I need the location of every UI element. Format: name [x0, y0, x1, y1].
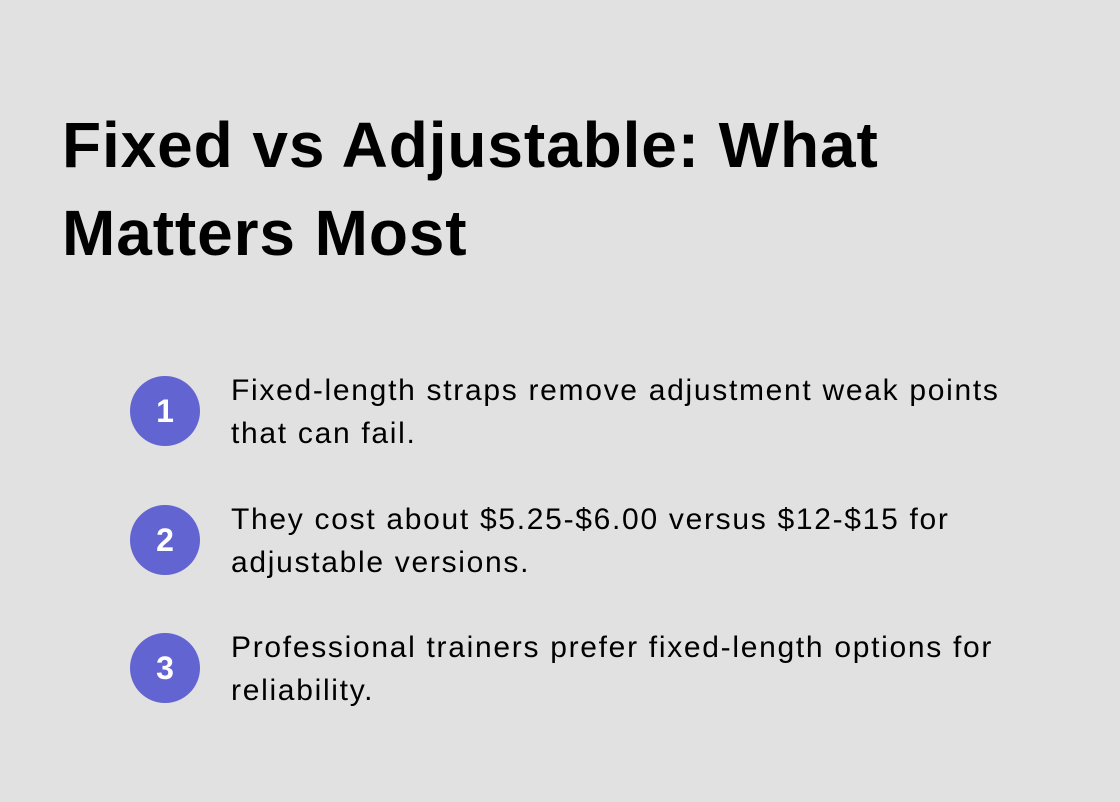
- badge 3: 3: [156, 650, 174, 686]
- text 3: reliability.: [231, 674, 374, 707]
- text 1: that can fail.: [231, 417, 417, 450]
- badge 1: 1: [156, 393, 174, 429]
- badge 3: [130, 633, 200, 703]
- title: Matters Most: [62, 197, 468, 269]
- text 2: They cost about $5.25-$6.00 versus $12-$15 for: [231, 503, 950, 536]
- item 2: [130, 503, 950, 579]
- badge 2: 2: [156, 522, 174, 558]
- title: [62, 109, 879, 269]
- text 1: Fixed-length straps remove adjustment weak points: [231, 374, 1000, 407]
- badge 1: [130, 376, 200, 446]
- text 1: [231, 374, 1000, 450]
- item 3: [130, 631, 993, 707]
- text 2: adjustable versions.: [231, 546, 530, 579]
- text 3: [231, 631, 993, 707]
- title: Fixed vs Adjustable: What: [62, 109, 879, 181]
- text 3: Professional trainers prefer fixed-length options for: [231, 631, 993, 664]
- item 1: [130, 374, 1000, 450]
- text 2: [231, 503, 950, 579]
- badge 2: [130, 505, 200, 575]
